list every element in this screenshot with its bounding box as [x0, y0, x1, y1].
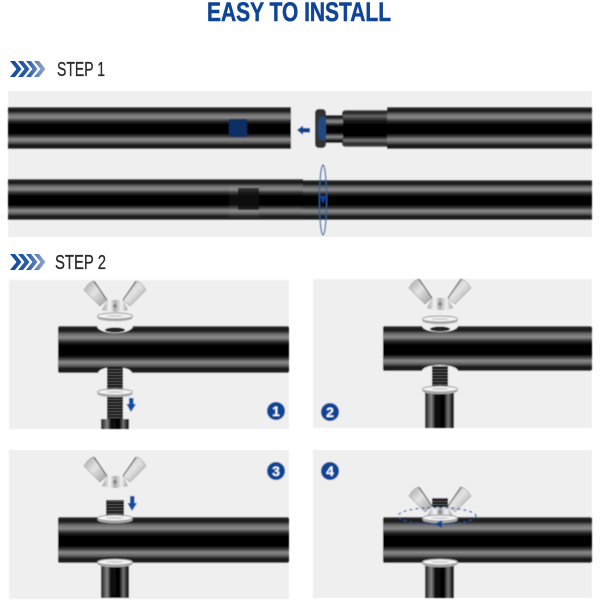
- arrow: down: [128, 496, 137, 511]
- heading: step 1: STEP 1: [57, 59, 105, 81]
- badge: 2: [321, 403, 339, 421]
- badge: 3: 3: [272, 463, 280, 479]
- left tube with square hole: [8, 107, 291, 149]
- badge: 4: 4: [326, 463, 334, 479]
- arrow: down: [126, 398, 136, 412]
- arrow: rotate nut: [398, 508, 476, 528]
- panel: step 1 tubes: [8, 91, 592, 237]
- panel: assembly 2: [313, 279, 592, 428]
- icon: step 2 chevrons: [10, 254, 46, 270]
- badge: 3: [267, 462, 285, 480]
- joined tubes: [8, 179, 592, 220]
- badge: 1: 1: [272, 403, 280, 419]
- panel: assembly 3: [9, 450, 289, 599]
- panel: assembly 4: [313, 450, 592, 598]
- badge: 4: [321, 462, 339, 480]
- right tube with locking cap: [315, 107, 592, 149]
- badge: 2: 2: [326, 404, 334, 420]
- panel: assembly 1: [9, 280, 289, 429]
- heading: step 2: STEP 2: [55, 252, 106, 274]
- icon: step 1 chevrons: [10, 61, 46, 77]
- arrow: insert left: [297, 126, 310, 135]
- arrow: rotate: [319, 165, 327, 235]
- badge: 1: [267, 402, 285, 420]
